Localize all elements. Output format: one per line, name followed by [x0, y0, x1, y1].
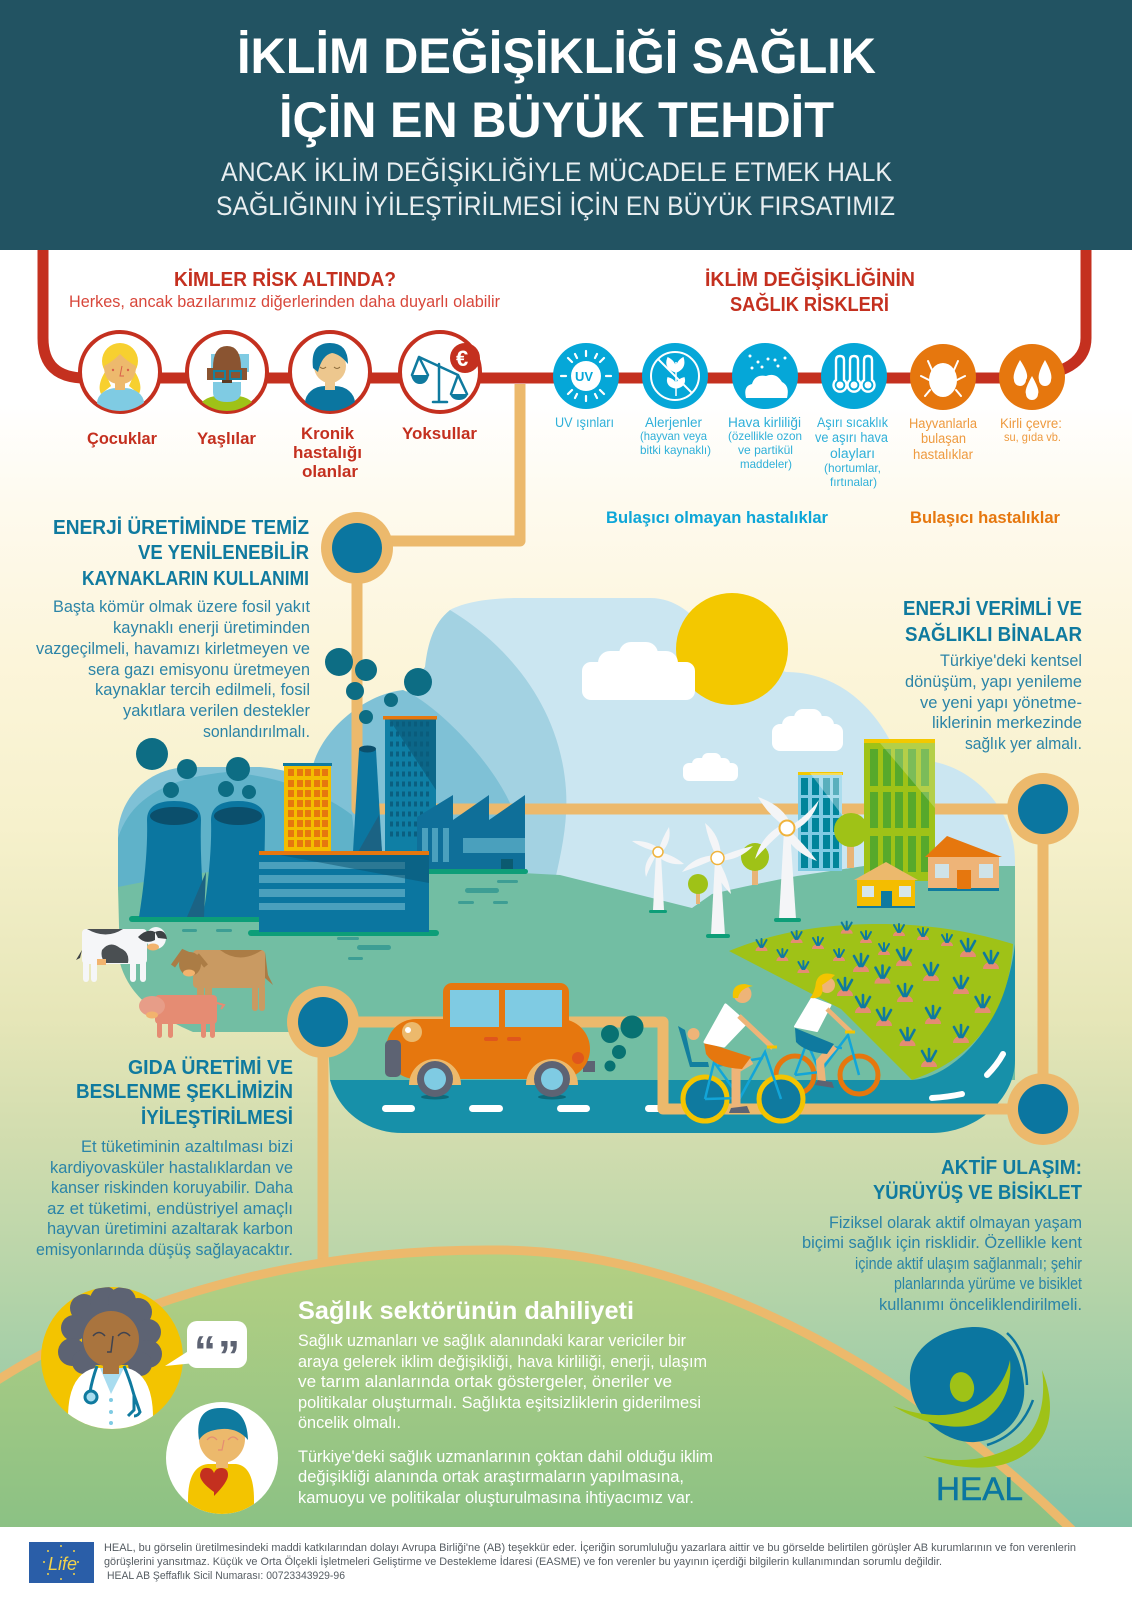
illustration: sky and land	[118, 598, 1015, 1133]
text block: health sector: değişikliği alanında ortak araştırmaların yapılmasına,	[298, 1468, 684, 1486]
text block: health sector: ve tarım alanlarında ortak göstergeler, öneriler ve	[298, 1373, 672, 1391]
text block: efficient buildings: ve yeni yapı yönetme-	[920, 694, 1082, 712]
icon: person with heart	[166, 1402, 278, 1520]
text block: food: kanser riskinden koruyabilir. Daha	[51, 1179, 294, 1197]
heading: who is at risk: Herkes, ancak bazılarımız diğerlerinden daha duyarlı olabilir	[69, 293, 500, 311]
text block: health sector: Türkiye'deki sağlık uzmanlarının çoktan dahil olduğu iklim	[298, 1448, 713, 1466]
text block: efficient buildings: liklerinin merkezinde	[932, 714, 1082, 732]
node: food	[287, 986, 359, 1058]
icon: allergens	[642, 343, 708, 409]
text block: clean energy: yakıtlara verilen destekler	[123, 702, 310, 720]
text block: health sector: Sağlık sektörünün dahiliyeti	[298, 1297, 634, 1325]
connector network: tan pipeline	[323, 384, 1043, 1262]
text block: clean energy: kaynaklı enerji üretiminden	[113, 619, 310, 637]
blue building	[798, 773, 842, 871]
icon: air pollution	[732, 343, 798, 409]
logo: HEAL	[893, 1327, 1050, 1507]
text block: active transport: planlarında yürüme ve bisiklet	[894, 1275, 1082, 1293]
logo: EU LIFE	[29, 1542, 94, 1583]
labels: at-risk groups: hastalığı	[293, 443, 362, 462]
speech bubble: ”	[218, 1332, 240, 1381]
text block: food: kardiyovasküler hastalıklardan ve	[50, 1159, 293, 1177]
labels: non-communicable risks: (hortumlar,	[824, 461, 881, 475]
trees	[847, 840, 854, 868]
labels: at-risk groups	[87, 424, 477, 481]
icon: sun	[676, 593, 788, 705]
icon: water drops	[999, 344, 1065, 410]
heading: who is at risk: KİMLER RİSK ALTINDA?	[174, 268, 396, 291]
title: İÇİN EN BÜYÜK TEHDİT	[279, 92, 834, 148]
house: yellow	[857, 880, 915, 906]
labels: non-communicable risks: ve partikül	[738, 443, 793, 457]
hill: health sector panel	[0, 1250, 1072, 1530]
chimney	[353, 750, 382, 852]
heading: who is at risk	[69, 268, 500, 311]
text block: efficient buildings: SAĞLIKLI BİNALAR	[905, 622, 1083, 646]
text block: efficient buildings: Türkiye'deki kentsel	[940, 652, 1082, 670]
acknowledgement text: HEAL, bu görselin üretilmesindeki maddi katkılarından dolayı Avrupa Birliği'ne (AB) teşekkür eder. İçeriğin sorumluluğu yazarlara aittir ve bu görselde belirtilen görüşler AB kurumlarının ve fon verenlerin	[104, 1541, 1076, 1554]
illustration: car	[385, 983, 644, 1100]
icon: doctor	[41, 1286, 183, 1440]
icon: poverty scale: €	[456, 346, 468, 371]
text block: clean energy: ENERJİ ÜRETİMİNDE TEMİZ	[53, 516, 309, 539]
cow: brown	[173, 950, 273, 1011]
text block: food	[36, 1056, 294, 1259]
acknowledgement text: HEAL AB Şeffaflık Sicil Numarası: 00723343929-96	[107, 1570, 345, 1582]
icon: disease vector insect	[910, 344, 976, 410]
text block: clean energy: sera gazı emisyonu üretmeyen	[88, 661, 310, 679]
text block: efficient buildings: sağlık yer almalı.	[965, 735, 1082, 753]
labels: communicable risks: hastalıklar	[913, 447, 973, 462]
text block: efficient buildings: ENERJİ VERİMLİ VE	[903, 597, 1082, 620]
blue tower	[385, 719, 436, 854]
labels: non-communicable risks: (özellikle ozon	[728, 429, 802, 443]
speech bubble: “	[194, 1327, 216, 1376]
text block: clean energy	[36, 516, 310, 741]
red connector line	[43, 250, 1086, 378]
field	[729, 924, 1013, 1080]
subtitle: SAĞLIĞININ İYİLEŞTİRİLMESİ İÇİN EN BÜYÜK FIRSATIMIZ	[216, 190, 895, 221]
text block: health sector: araya gelerek iklim değişikliği, hava kirliliği, enerji, ulaşım	[298, 1353, 707, 1371]
labels: at-risk groups: Kronik	[301, 424, 355, 443]
text block: health sector: kamuoyu ve politikalar oluşturulmasına ihtiyacımız var.	[298, 1489, 694, 1507]
node: buildings	[1007, 773, 1079, 845]
acknowledgement text	[104, 1541, 1076, 1582]
smoke	[136, 648, 432, 799]
text block: food: BESLENME ŞEKLİMİZİN	[76, 1080, 293, 1103]
header band	[0, 0, 1132, 250]
text block: active transport: AKTİF ULAŞIM:	[941, 1156, 1082, 1179]
labels: non-communicable risks: (hayvan veya	[640, 429, 707, 443]
icon: elderly person	[187, 332, 267, 426]
yellow building	[283, 763, 332, 766]
labels: at-risk groups: Yaşlılar	[197, 429, 256, 448]
acknowledgement text: görüşlerini yansıtmaz. Küçük ve Orta Ölçekli İşletmeleri Geliştirme ve Destekleme İdaresi (EASME) ve fon verenler bu yayının içerdiği bilgilerin kullanımından sorumlu değildir.	[104, 1555, 942, 1568]
main building	[248, 930, 439, 936]
text block: food: emisyonlarında düşüş sağlayacaktır.	[36, 1241, 293, 1259]
ground dashes	[182, 880, 518, 960]
labels: communicable risks	[909, 416, 1062, 462]
text block: active transport: kullanımı önceliklendirilmeli.	[879, 1296, 1082, 1314]
icon: poverty scale	[400, 332, 480, 412]
text block: clean energy: KAYNAKLARIN KULLANIMI	[82, 568, 309, 590]
labels: non-communicable risks: ve aşırı hava	[815, 430, 888, 445]
illustration: cyclist man with child	[678, 984, 803, 1121]
logo: EU LIFE: Life	[48, 1554, 77, 1574]
labels: non-communicable risks: maddeler)	[740, 457, 792, 471]
text block: active transport: içinde aktif ulaşım sağlanmalı; şehir	[855, 1255, 1082, 1273]
icon: chronic patient	[290, 332, 370, 420]
labels: non-communicable risks	[555, 415, 888, 489]
wind turbines	[632, 797, 819, 935]
text block: active transport: biçimi sağlık için risklidir. Özellikle kent	[802, 1234, 1082, 1252]
road	[330, 944, 1015, 1133]
house: orange roof	[928, 857, 999, 888]
title: İKLİM DEĞİŞİKLİĞİ SAĞLIK	[237, 28, 876, 84]
labels: communicable risks: bulaşan	[921, 431, 966, 446]
text block: food: Et tüketiminin azaltılması bizi	[81, 1138, 293, 1156]
text block: food: hayvan üretimini azaltarak karbon	[47, 1220, 293, 1238]
text block: health sector	[298, 1297, 713, 1507]
node: energy	[321, 512, 393, 584]
cow: black and white	[76, 927, 167, 982]
icon: UV rays: UV	[575, 369, 593, 384]
footer	[0, 1527, 1132, 1600]
subtitle: ANCAK İKLİM DEĞİŞİKLİĞİYLE MÜCADELE ETMEK HALK	[221, 156, 892, 187]
title	[237, 28, 876, 148]
text block: clean energy: vazgeçilmeli, havamızı kirletmeyen ve	[36, 640, 310, 658]
labels: non-communicable risks: olayları	[830, 446, 875, 461]
heading: health risks	[705, 267, 915, 316]
cooling towers	[139, 801, 205, 917]
text block: food: GIDA ÜRETİMİ VE	[128, 1056, 293, 1079]
text block: health sector: politikalar oluşturmalı. Sağlıkta eşitsizliklerin giderilmesi	[298, 1394, 701, 1412]
icon: child	[80, 332, 160, 418]
illustration: power plant and factories	[129, 648, 528, 960]
node: active transport	[1007, 1073, 1079, 1145]
subtitle	[216, 156, 895, 221]
text block: clean energy: kaynaklar tercih edilmeli, fosil	[95, 681, 310, 699]
labels: non-communicable risks: Alerjenler	[645, 415, 702, 430]
labels: communicable risks: su, gıda vb.	[1004, 430, 1061, 444]
labels: at-risk groups: Yoksullar	[402, 424, 477, 443]
heading: health risks: SAĞLIK RİSKLERİ	[730, 292, 889, 316]
heading: health risks: İKLİM DEĞİŞİKLİĞİNİN	[705, 267, 915, 291]
text block: food: az et tüketimi, endüstriyel amaçlı	[47, 1200, 293, 1218]
text block: efficient buildings	[903, 597, 1083, 753]
text block: food: İYİLEŞTİRİLMESİ	[141, 1106, 293, 1129]
labels: non-communicable risks: fırtınalar)	[830, 475, 877, 489]
icon: extreme temperature	[821, 343, 887, 409]
text block: active transport: YÜRÜYÜŞ VE BİSİKLET	[873, 1181, 1082, 1204]
labels: non-communicable risks: Hava kirliliği	[728, 415, 801, 430]
text block: clean energy: Başta kömür olmak üzere fosil yakıt	[53, 598, 310, 616]
labels: at-risk groups: Çocuklar	[87, 429, 157, 448]
category: communicable diseases: Bulaşıcı hastalıklar	[910, 508, 1060, 527]
pig	[139, 995, 224, 1038]
icon: UV rays	[553, 343, 619, 409]
labels: communicable risks: Kirli çevre:	[1000, 416, 1062, 431]
illustration: animals	[76, 927, 273, 1038]
text block: clean energy: VE YENİLENEBİLİR	[138, 541, 310, 564]
text block: active transport	[802, 1156, 1082, 1314]
labels: at-risk groups: olanlar	[302, 462, 358, 481]
category: non-communicable diseases: Bulaşıcı olmayan hastalıklar	[606, 508, 828, 527]
labels: non-communicable risks: bitki kaynaklı)	[640, 443, 711, 457]
road dashes	[382, 1054, 1003, 1112]
logo: HEAL: HEAL	[936, 1471, 1023, 1507]
text block: active transport: Fiziksel olarak aktif olmayan yaşam	[829, 1214, 1082, 1232]
illustration: cyclist woman	[776, 974, 878, 1094]
green building	[864, 741, 935, 881]
text block: health sector: öncelik olmalı.	[298, 1414, 401, 1432]
labels: non-communicable risks: UV ışınları	[555, 415, 614, 430]
labels: non-communicable risks: Aşırı sıcaklık	[817, 415, 888, 430]
text block: health sector: Sağlık uzmanları ve sağlık alanındaki karar vericiler bir	[298, 1332, 686, 1350]
illustration: green city	[632, 739, 1002, 938]
text block: efficient buildings: dönüşüm, yapı yenileme	[905, 673, 1082, 691]
text block: clean energy: sonlandırılmalı.	[203, 723, 310, 741]
labels: communicable risks: Hayvanlarla	[909, 416, 977, 431]
speech bubble	[165, 1321, 247, 1381]
sawtooth factory	[417, 795, 525, 870]
clouds	[582, 642, 843, 781]
illustration: carrots in the field	[756, 922, 999, 1067]
